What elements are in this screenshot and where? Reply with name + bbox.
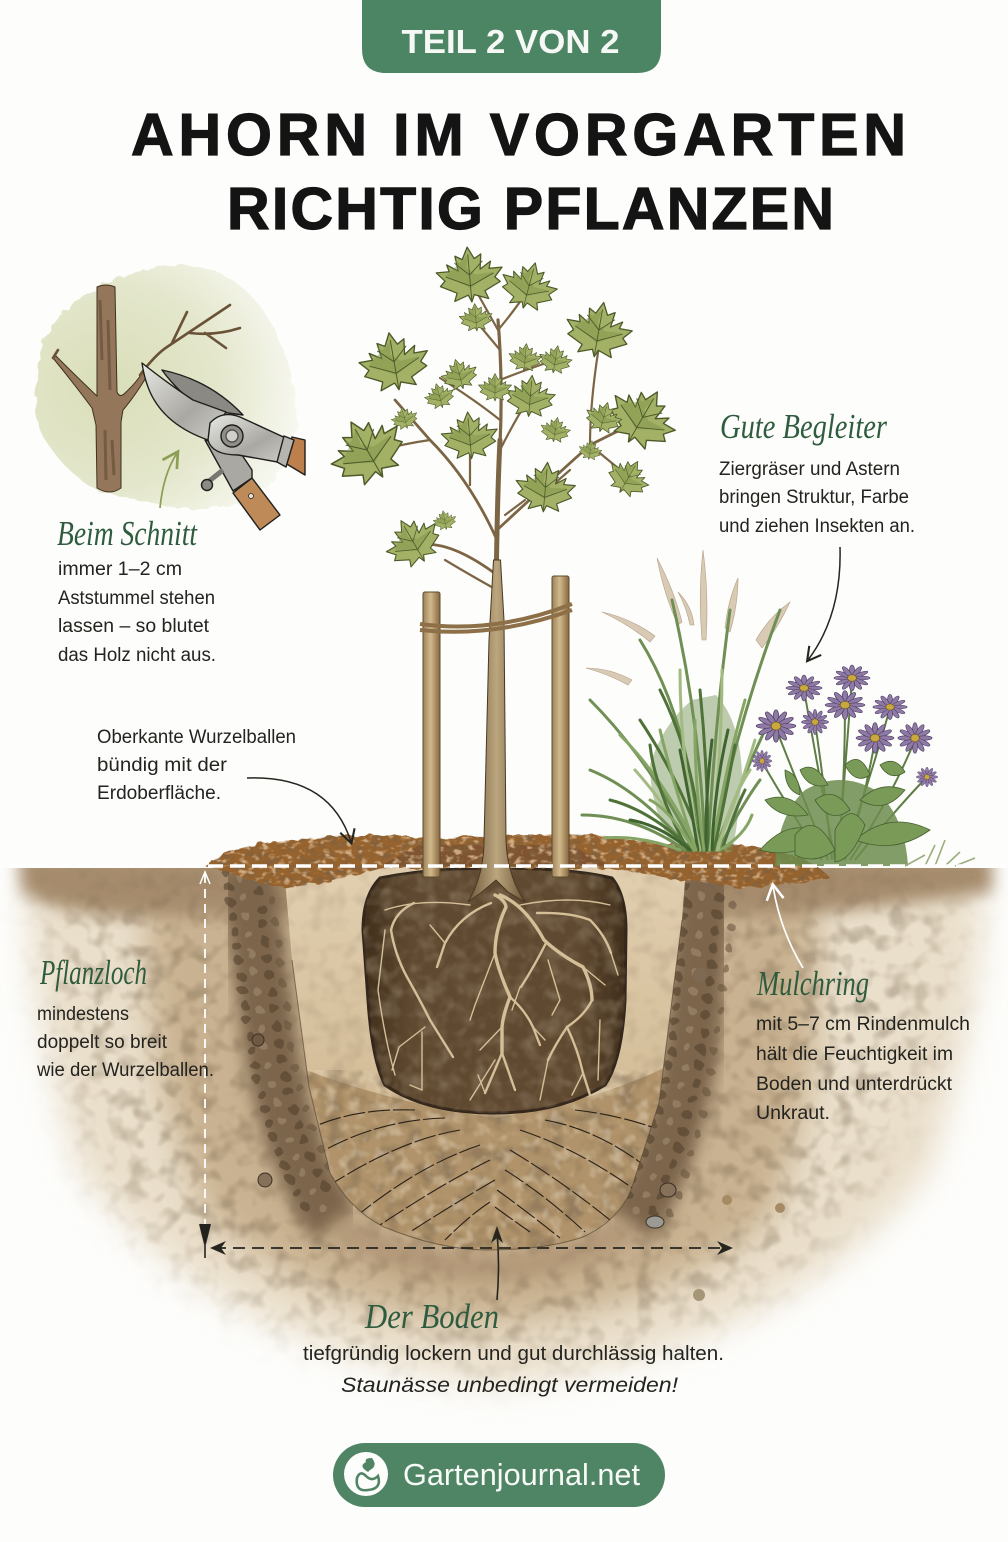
mid soil tone bbox=[146, 868, 819, 1325]
mulch ring bbox=[205, 833, 830, 890]
ornamental grass bbox=[582, 550, 790, 852]
icon: logo bbox=[344, 1452, 388, 1496]
loosened soil base bbox=[307, 1068, 663, 1250]
hole outline bbox=[292, 920, 682, 1250]
ground line bbox=[10, 864, 1006, 868]
tree bbox=[318, 244, 687, 902]
text block: Mulchring: mit 5–7 cm Rindenmulch bbox=[756, 1014, 970, 1035]
text block: Gute Begleiter bbox=[719, 407, 915, 537]
small grass tuft bbox=[905, 840, 975, 866]
arrow: to cut bbox=[160, 453, 177, 508]
text block: Oberkante Wurzelballen: Erdoberfläche. bbox=[97, 783, 221, 804]
text block: Der Boden: Staunässe unbedingt vermeiden! bbox=[341, 1374, 678, 1397]
text block: Beim Schnitt: das Holz nicht aus. bbox=[58, 645, 216, 666]
text block: Pflanzloch: mindestens bbox=[37, 1004, 129, 1025]
asters bbox=[752, 665, 975, 866]
aster leaves bbox=[760, 759, 930, 862]
aster foliage mass bbox=[775, 780, 908, 866]
text block: Beim Schnitt: immer 1–2 cm bbox=[58, 559, 182, 580]
text block: Gute Begleiter: Gute Begleiter bbox=[720, 407, 887, 446]
title bbox=[131, 102, 906, 242]
text block: Pflanzloch: doppelt so breit bbox=[37, 1032, 168, 1053]
dimension: hole depth bbox=[200, 872, 210, 1258]
top soil band bbox=[18, 855, 992, 917]
arrow: Oberkante bbox=[247, 778, 351, 842]
text block: Beim Schnitt: Aststummel stehen bbox=[58, 588, 215, 609]
footer badge: Gartenjournal.net bbox=[333, 1443, 665, 1507]
badge: Teil 2 von 2 bbox=[362, 0, 661, 73]
rope tie bbox=[420, 604, 572, 632]
text block: Mulchring: Boden und unterdrückt bbox=[756, 1074, 953, 1095]
outer soil wash bbox=[29, 868, 981, 1385]
roots bbox=[378, 895, 618, 1100]
stems bbox=[762, 680, 926, 860]
text block: Oberkante Wurzelballen: Oberkante Wurzelballen bbox=[97, 727, 296, 748]
footer badge: Gartenjournal.net: Gartenjournal.net bbox=[403, 1457, 640, 1492]
grass blades bbox=[582, 600, 780, 850]
badge: Teil 2 von 2: TEIL 2 VON 2 bbox=[402, 23, 620, 60]
text block: Beim Schnitt bbox=[57, 514, 216, 666]
text block: Beim Schnitt: Beim Schnitt bbox=[57, 514, 198, 553]
grass fill bbox=[650, 695, 742, 852]
text block: Mulchring: hält die Feuchtigkeit im bbox=[756, 1044, 953, 1065]
hatching in loosened soil bbox=[318, 1110, 660, 1240]
trunk bbox=[468, 560, 525, 902]
grass plumes bbox=[586, 550, 790, 685]
leaves bbox=[318, 244, 687, 575]
text block: Gute Begleiter: Ziergräser und Astern bbox=[719, 459, 900, 480]
rim bottom soft bbox=[335, 1225, 630, 1268]
title: RICHTIG PFLANZEN bbox=[227, 176, 834, 242]
stakes bbox=[423, 576, 569, 877]
text block: Gute Begleiter: und ziehen Insekten an. bbox=[719, 516, 915, 537]
text block: Oberkante Wurzelballen: bündig mit der bbox=[97, 755, 228, 776]
text block: Gute Begleiter: bringen Struktur, Farbe bbox=[719, 487, 909, 508]
text block: Der Boden: tiefgründig lockern und gut durchlässig halten. bbox=[303, 1343, 724, 1365]
arrow: Gute Begleiter bbox=[808, 547, 840, 660]
text block: Pflanzloch bbox=[36, 953, 214, 1081]
text block: Der Boden: Der Boden bbox=[364, 1297, 499, 1336]
text block: Beim Schnitt: lassen – so blutet bbox=[58, 616, 210, 637]
branch with side shoots bbox=[53, 285, 240, 492]
aster flowers bbox=[752, 665, 938, 787]
soil mottling bbox=[30, 880, 967, 1386]
text block: Mulchring: Unkraut. bbox=[756, 1103, 830, 1124]
planting hole backfill bbox=[286, 868, 685, 1250]
text block: Der Boden bbox=[303, 1297, 724, 1397]
title: AHORN IM VORGARTEN bbox=[131, 102, 906, 168]
text block: Pflanzloch: wie der Wurzelballen. bbox=[36, 1060, 214, 1081]
branches bbox=[365, 280, 640, 600]
arrow: Der Boden bbox=[491, 1226, 503, 1300]
text block: Pflanzloch: Pflanzloch bbox=[39, 953, 147, 992]
panel: soil cross-section bbox=[0, 855, 1008, 1426]
panel: pruning illustration bbox=[35, 265, 305, 530]
text block: Mulchring bbox=[756, 964, 970, 1124]
text block: Mulchring: Mulchring bbox=[756, 964, 869, 1003]
watercolor wash circle bbox=[35, 265, 297, 509]
icon: pruning shears bbox=[142, 363, 305, 530]
text block: Oberkante Wurzelballen bbox=[97, 727, 296, 804]
dimension: hole width bbox=[210, 1241, 733, 1255]
root ball bbox=[360, 866, 630, 1116]
dark hole rim right bbox=[630, 866, 708, 1225]
rim pebbles bbox=[226, 872, 736, 1225]
stones bbox=[252, 968, 785, 1301]
dark hole rim left bbox=[246, 866, 335, 1225]
arrow: Mulchring bbox=[773, 886, 803, 968]
